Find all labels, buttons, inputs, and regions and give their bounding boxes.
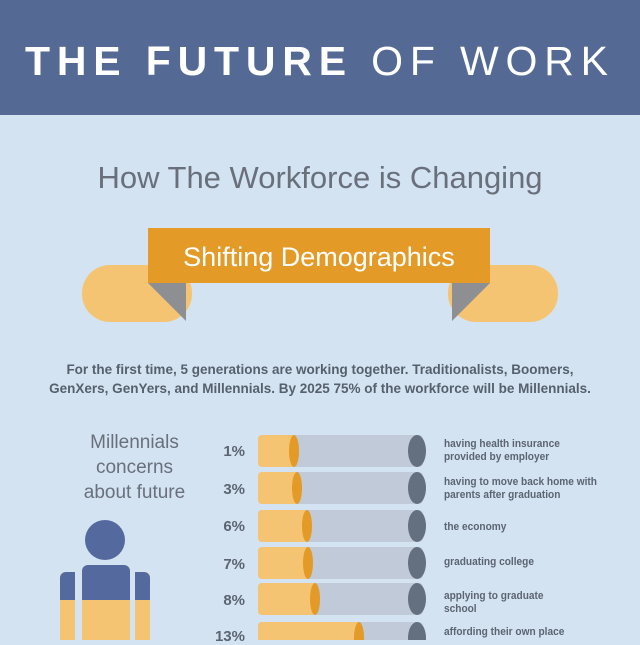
labels: having health insurance bbox=[444, 438, 560, 450]
intro paragraph: For the first time, 5 generations are working together. Traditionalists, Boomers, bbox=[66, 362, 574, 377]
text: 3% bbox=[223, 481, 245, 498]
header banner bbox=[0, 0, 640, 115]
text: 13% bbox=[215, 628, 245, 645]
text: graduating college bbox=[444, 556, 534, 568]
labels: provided by employer bbox=[444, 451, 549, 463]
ribbon: Shifting Demographics bbox=[82, 228, 558, 322]
text: having to move back home with bbox=[444, 476, 597, 488]
subtitle: How The Workforce is Changing bbox=[97, 160, 543, 195]
bar chart bbox=[258, 435, 426, 640]
icon: person bbox=[60, 520, 150, 640]
text: applying to graduate bbox=[444, 590, 544, 602]
percentages: 1% bbox=[223, 443, 245, 460]
ribbon: Shifting Demographics: Shifting Demographics bbox=[183, 242, 455, 272]
text: parents after graduation bbox=[444, 489, 560, 501]
title: THE FUTURE OF WORK bbox=[25, 38, 608, 84]
labels bbox=[444, 438, 560, 463]
heading: Millennials concerns: Millennials concerns about future bbox=[84, 432, 185, 503]
text: 6% bbox=[223, 518, 245, 535]
intro paragraph: GenXers, GenYers, and Millennials. By 2025 75% of the workforce will be Millennials. bbox=[49, 381, 591, 396]
text: 7% bbox=[223, 556, 245, 573]
text: 8% bbox=[223, 592, 245, 609]
text: the economy bbox=[444, 521, 506, 533]
intro paragraph bbox=[49, 362, 591, 396]
text: affording their own place bbox=[444, 626, 564, 638]
text: school bbox=[444, 603, 477, 615]
